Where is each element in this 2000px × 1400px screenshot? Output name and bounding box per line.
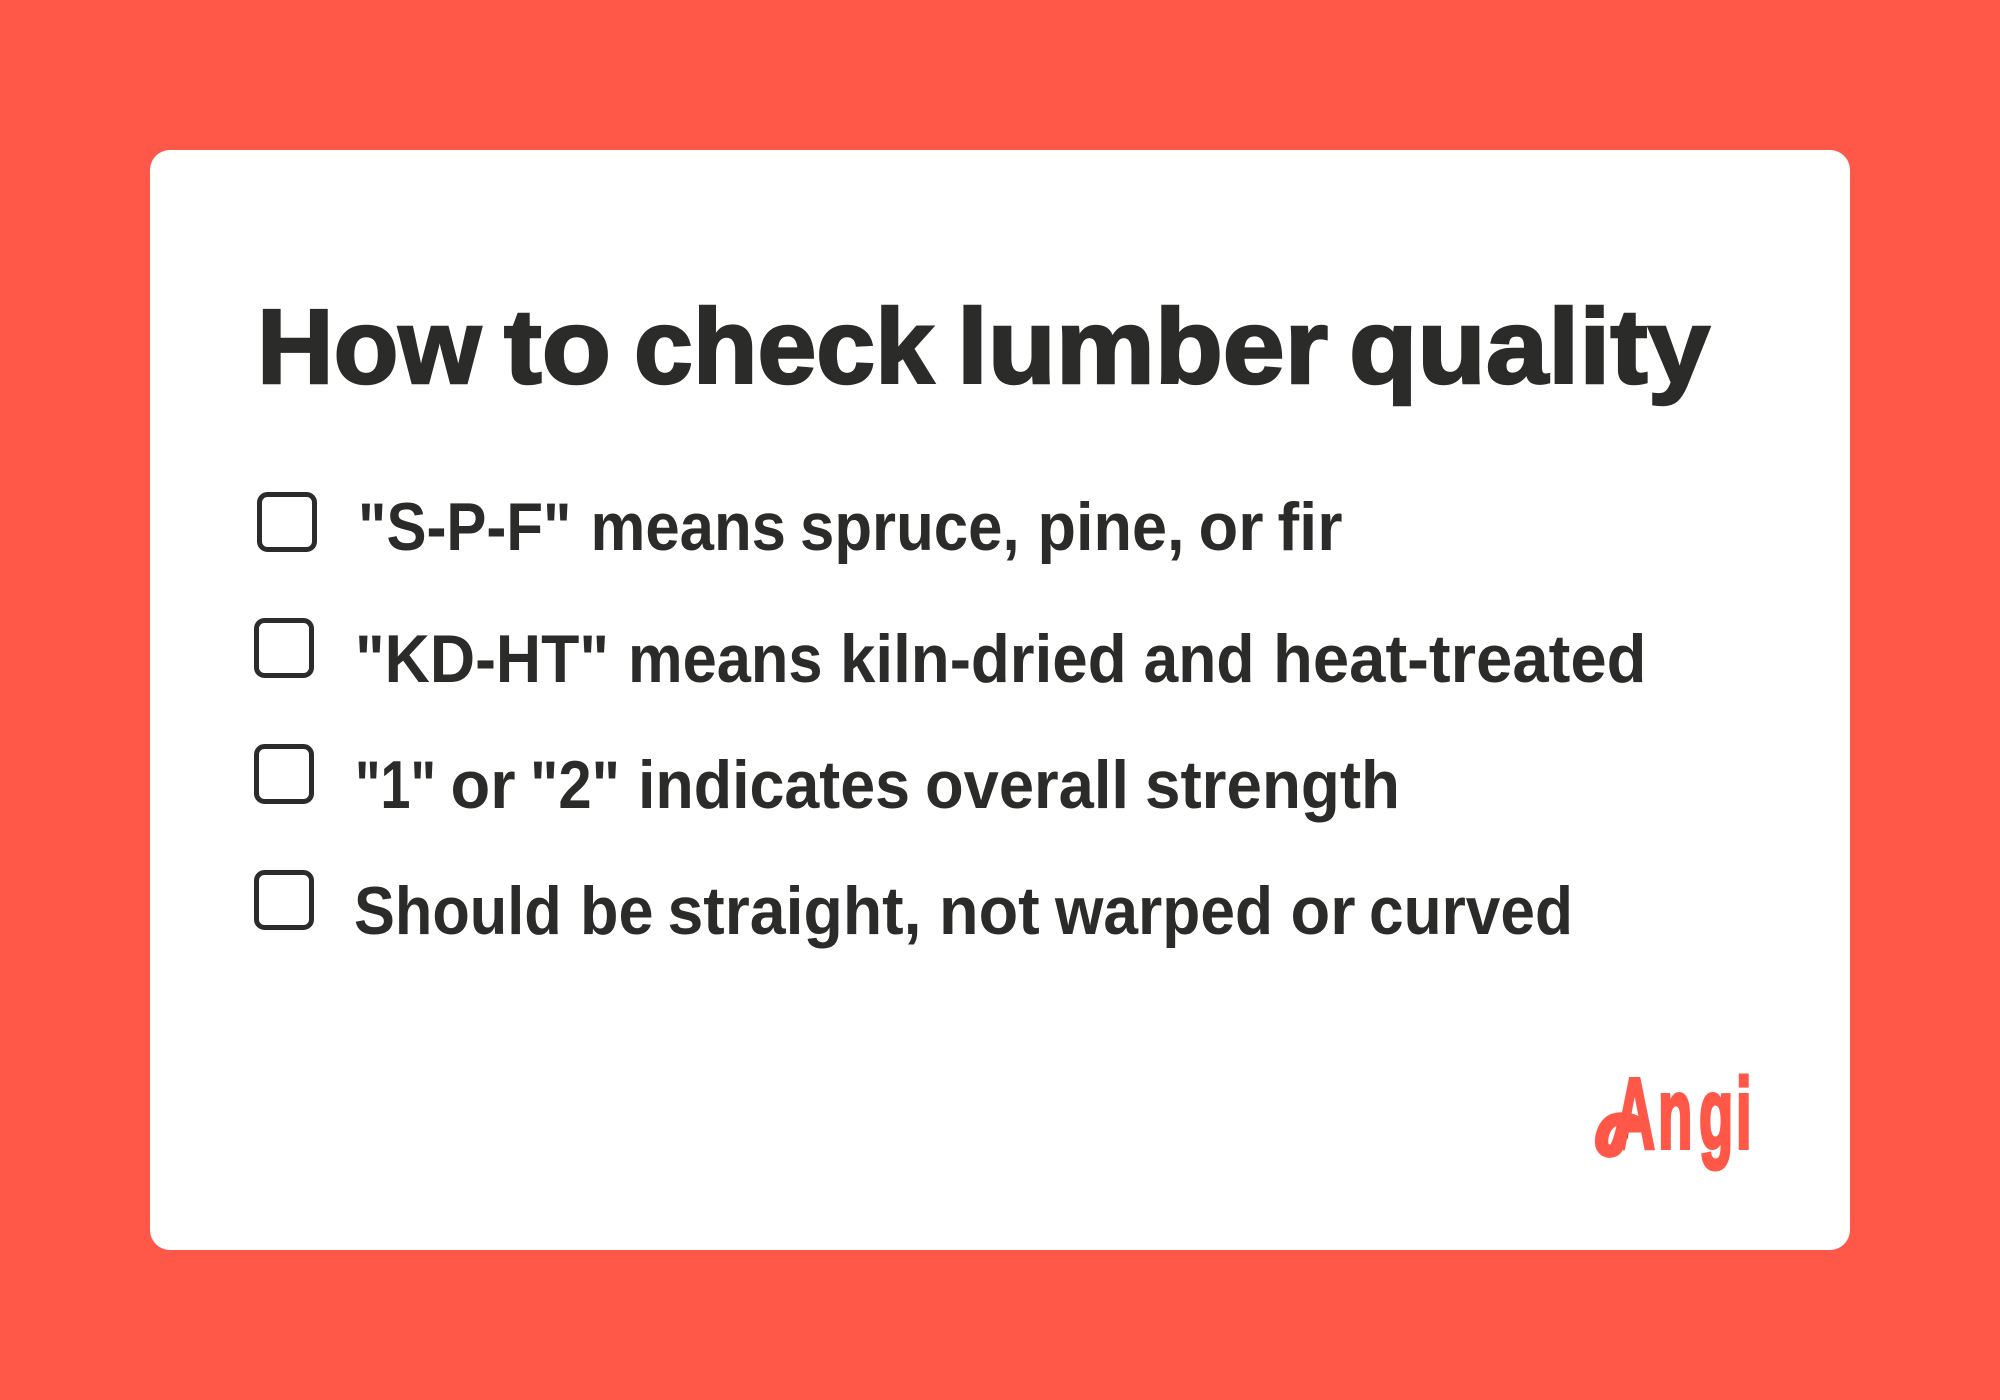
checklist item 1: "S-P-F" [358,489,572,565]
checklist item 2: and [1144,621,1254,697]
title [257,288,1710,406]
checklist item 3: overall [925,747,1129,823]
checklist item 3: "1" [355,747,436,823]
checklist item 1: spruce, [800,489,1020,565]
title: quality [1349,288,1710,406]
logo wordmark: Angi [1614,1059,1752,1170]
checklist item 3: or [450,747,516,823]
checklist item 2 [355,621,1646,697]
title: to [504,288,611,406]
panel: white card [150,150,1850,1250]
checklist item 1 [358,489,1342,565]
checklist item 1: fir [1278,489,1342,565]
icon: checkbox 1 [260,494,314,550]
checklist item 4: or [1290,873,1356,949]
icon: checkbox 3 [256,746,312,802]
checklist item 2: "KD-HT" [355,621,609,697]
checklist item 3: "2" [530,747,620,823]
checklist item 3 [355,747,1400,823]
title: How [257,288,482,406]
checklist [256,489,1646,949]
checklist item 4: Should [354,873,562,949]
title: lumber [957,288,1328,406]
checklist item 4: not [939,873,1040,949]
checklist item 4: curved [1369,873,1573,949]
checklist item 4: straight, [668,873,922,949]
logo: Angi [1602,1059,1752,1170]
checklist item 4 [354,873,1573,949]
logo loop [1602,1119,1640,1151]
checklist item 2: means [628,621,822,697]
icon: checkbox 4 [256,872,312,928]
checklist item 4: warped [1054,873,1273,949]
checklist item 3: indicates [638,747,910,823]
title: check [634,288,935,406]
checklist item 2: heat-treated [1273,621,1646,697]
checklist item 1: means [590,489,786,565]
checklist item 2: kiln-dried [840,621,1127,697]
checklist item 1: pine, [1038,489,1184,565]
checklist item 3: strength [1145,747,1400,823]
checklist item 1: or [1198,489,1264,565]
checklist item 4: be [580,873,654,949]
icon: checkbox 2 [256,620,312,676]
